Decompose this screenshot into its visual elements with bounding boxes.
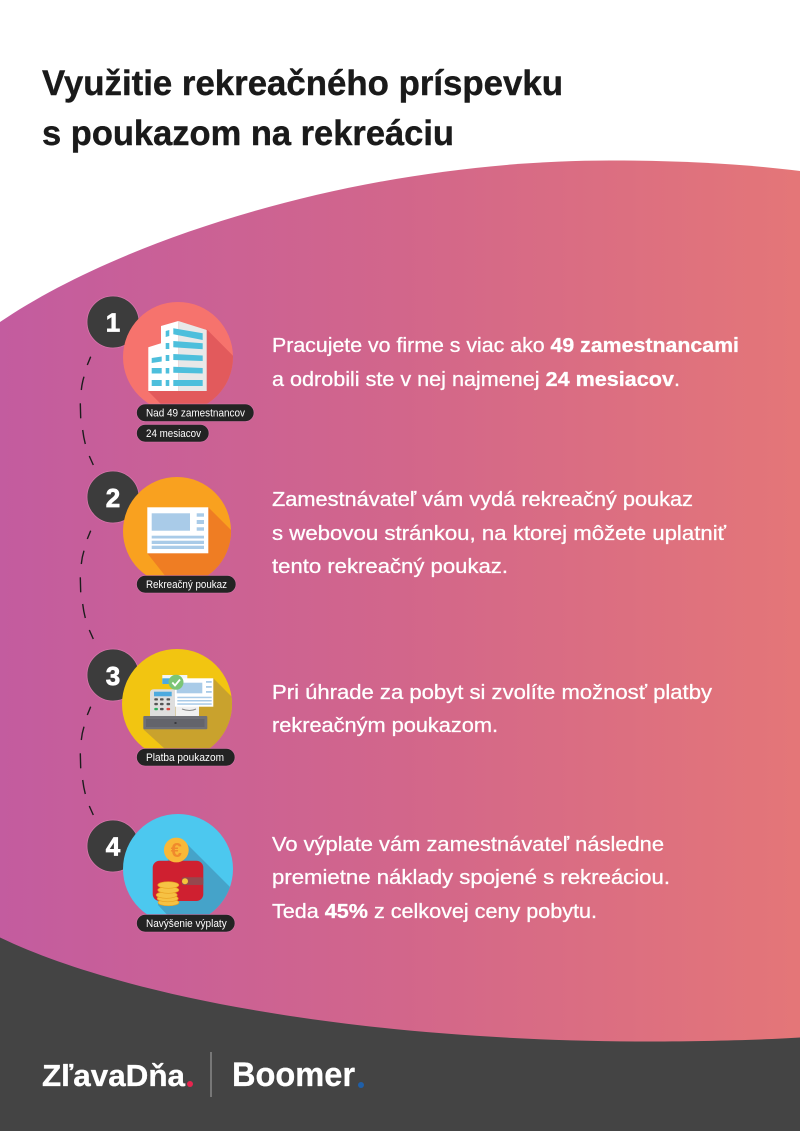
number badge 2: 2 — [106, 483, 120, 513]
dark footer panel — [0, 938, 800, 1131]
label: Platba poukazom — [136, 748, 235, 766]
number badge 1: 1 — [106, 308, 120, 338]
number badge 3 — [87, 649, 139, 701]
label: 24 mesiacov — [136, 424, 209, 442]
label: Platba poukazom: Platba poukazom — [146, 752, 224, 764]
label: Rekreačný poukaz — [136, 576, 236, 593]
title: s poukazom na rekreáciu — [42, 114, 454, 153]
label: Navýšenie výplaty — [136, 914, 235, 932]
icon: wallet and coins — [123, 814, 233, 914]
dashed connector 1 to 2 — [80, 357, 93, 465]
logo divider — [210, 1052, 212, 1097]
number badge 4 — [87, 820, 139, 872]
step 1 — [86, 296, 738, 442]
gradient background panel — [0, 160, 800, 1045]
text: step 4: Teda 45% z celkovej ceny pobytu. — [272, 900, 597, 923]
text: step 3: Pri úhrade za pobyt si zvolíte možnosť platby — [272, 681, 713, 704]
number badge 2 — [87, 471, 139, 523]
number badge 1 — [87, 296, 139, 348]
logo: Boomer: Boomer — [232, 1056, 355, 1094]
text: step 4: Vo výplate vám zamestnávateľ následne — [272, 833, 664, 856]
step 4 — [86, 814, 668, 932]
text: step 3: rekreačným poukazom. — [272, 714, 498, 737]
text: step 3 — [272, 681, 713, 737]
text: step 2: s webovou stránkou, na ktorej môžete uplatniť — [272, 522, 726, 545]
step 3 — [86, 648, 712, 766]
text: step 2 — [272, 488, 726, 578]
icon: wallet and coins: € — [171, 840, 182, 862]
text: step 1: Pracujete vo firme s viac ako 49 zamestnancami — [272, 334, 739, 357]
logo: ZľavaDňa: ZľavaDňa — [42, 1058, 186, 1093]
text: step 4 — [272, 833, 670, 923]
label: Rekreačný poukaz: Rekreačný poukaz — [146, 579, 227, 591]
text: step 1 — [272, 334, 739, 391]
text: step 4: premietne náklady spojené s rekreáciou. — [272, 866, 670, 889]
label: Nad 49 zamestnancov: Nad 49 zamestnancov — [146, 408, 245, 420]
dashed connector 2 to 3 — [80, 531, 93, 639]
text: step 2: tento rekreačný poukaz. — [272, 555, 508, 578]
text: step 2: Zamestnávateľ vám vydá rekreačný poukaz — [272, 488, 693, 511]
title — [42, 64, 563, 153]
label: Nad 49 zamestnancov — [136, 404, 254, 422]
icon: office building — [123, 302, 233, 404]
icon: cash register — [122, 649, 232, 748]
text: step 1: a odrobili ste v nej najmenej 24 mesiacov . — [272, 368, 680, 391]
dashed connector 3 to 4 — [80, 707, 93, 815]
label: 24 mesiacov: 24 mesiacov — [146, 428, 201, 440]
number badge 3: 3 — [106, 661, 120, 691]
icon: voucher — [123, 477, 231, 576]
number badge 4: 4 — [106, 832, 121, 862]
step 2 — [86, 470, 726, 594]
label: Navýšenie výplaty: Navýšenie výplaty — [146, 918, 227, 930]
title: Využitie rekreačného príspevku — [42, 64, 563, 103]
